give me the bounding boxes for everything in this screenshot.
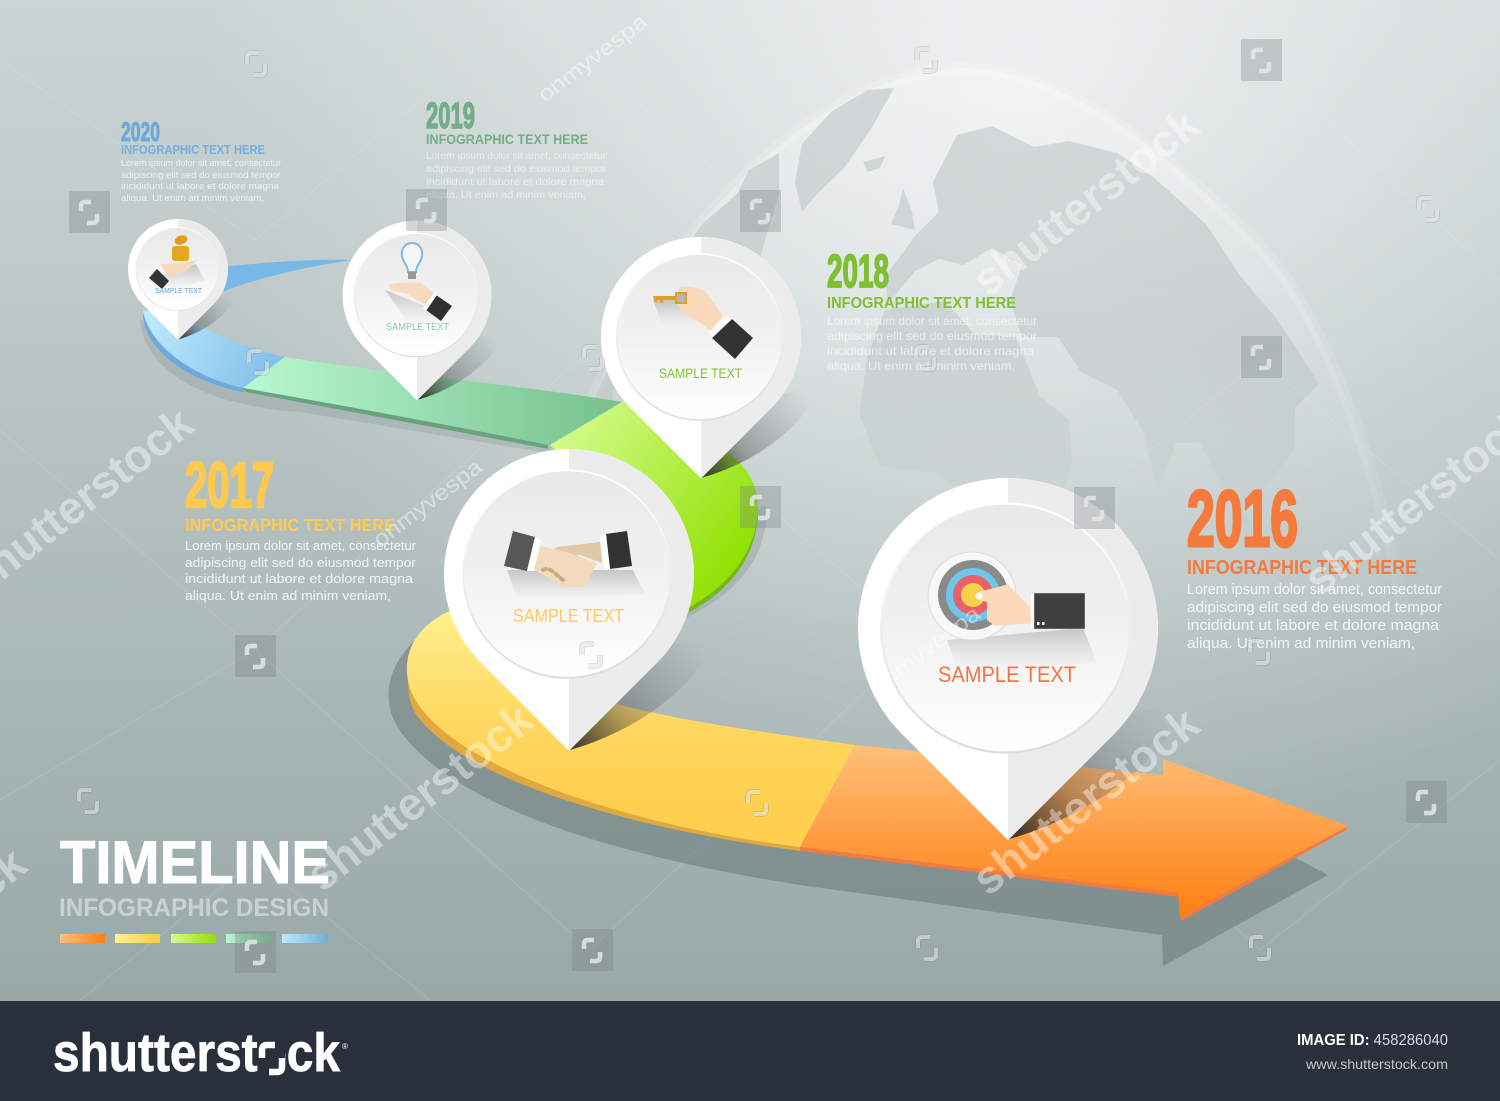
text block: 2018 bbox=[827, 245, 1037, 373]
title: TIMELINE bbox=[60, 829, 330, 896]
body text: incididunt ut labore et dolore magna bbox=[121, 181, 280, 192]
icon: hand with light bulb bbox=[385, 243, 452, 325]
pin: 2016 bbox=[858, 478, 1188, 840]
pin: 2018 bbox=[601, 237, 821, 478]
pin: 2017 bbox=[444, 449, 719, 751]
image id: IMAGE ID: 458286040 bbox=[1297, 1032, 1448, 1049]
text block: 2019 bbox=[426, 95, 607, 201]
ribbon segment: yellow 2017 bbox=[407, 606, 855, 851]
body text: aliqua. Ut enim ad minim veniam, bbox=[426, 189, 586, 201]
pin: 2019 bbox=[342, 220, 506, 400]
body text bbox=[827, 314, 1037, 373]
body text: incididunt ut labore et dolore magna bbox=[185, 571, 414, 586]
timeline ribbon bbox=[140, 260, 1348, 966]
title block bbox=[59, 829, 330, 943]
watermark text: shutterstock: shutterstock bbox=[962, 97, 1209, 306]
year 2016: 2016 bbox=[1187, 474, 1298, 563]
body text: aliqua. Ut enim ad minim veniam, bbox=[185, 588, 391, 603]
colour legend bars bbox=[60, 934, 328, 943]
ribbon back strip: blue bbox=[222, 260, 352, 291]
watermark text: shutterstock: shutterstock bbox=[962, 696, 1209, 905]
heading: INFOGRAPHIC TEXT HERE bbox=[827, 295, 1016, 312]
body text bbox=[185, 538, 417, 603]
icon: target with pointing hand bbox=[928, 552, 1097, 670]
body text: aliqua. Ut enim ad minim veniam, bbox=[121, 193, 264, 204]
icon: handshake bbox=[504, 531, 645, 600]
world globe bbox=[500, 68, 1412, 680]
text block: 2020 bbox=[121, 117, 281, 204]
body text: incididunt ut labore et dolore magna bbox=[1187, 618, 1440, 634]
year 2019: 2019 bbox=[426, 95, 475, 136]
text block: 2017 bbox=[185, 449, 417, 603]
icon: hand with key bbox=[653, 287, 753, 359]
pin label: SAMPLE TEXT bbox=[386, 322, 449, 333]
upper ribbon shadow bbox=[140, 320, 610, 455]
body text: Lorem ipsum dolor sit amet, consectetur bbox=[827, 314, 1037, 328]
body text: aliqua. Ut enim ad minim veniam, bbox=[1187, 636, 1415, 652]
ribbon ground shadow bbox=[389, 620, 1328, 966]
pin label: SAMPLE TEXT bbox=[155, 288, 203, 295]
body text: adipiscing elit sed do eiusmod tempor bbox=[185, 555, 417, 570]
watermark text: onmyvespa bbox=[368, 8, 986, 699]
text block: 2016 bbox=[1187, 474, 1442, 652]
body text: Lorem ipsum dolor sit amet, consectetur bbox=[1187, 582, 1442, 598]
body text: incididunt ut labore et dolore magna bbox=[827, 344, 1034, 358]
subtitle: INFOGRAPHIC DESIGN bbox=[59, 894, 329, 922]
website: www.shutterstock.com bbox=[1305, 1056, 1448, 1072]
pin label: SAMPLE TEXT bbox=[938, 662, 1076, 687]
lime ribbon shadow bbox=[620, 505, 766, 660]
body text bbox=[121, 158, 281, 204]
year 2018: 2018 bbox=[827, 245, 889, 297]
footer logo: shutterstock bbox=[53, 1023, 341, 1083]
ribbon segment: blue 2020 bbox=[143, 310, 285, 392]
year 2017: 2017 bbox=[185, 449, 274, 521]
pin label: SAMPLE TEXT bbox=[659, 366, 742, 381]
body text: incididunt ut labore et dolore magna bbox=[426, 176, 604, 188]
heading: INFOGRAPHIC TEXT HERE bbox=[121, 143, 265, 157]
year 2020: 2020 bbox=[121, 117, 160, 147]
footer bar bbox=[0, 1001, 1500, 1101]
heading: INFOGRAPHIC TEXT HERE bbox=[426, 131, 588, 147]
body text: Lorem ipsum dolor sit amet, consectetur bbox=[426, 150, 606, 162]
body text bbox=[426, 150, 607, 201]
body text: adipiscing elit sed do eiusmod tempor bbox=[1187, 600, 1442, 616]
body text: aliqua. Ut enim ad minim veniam, bbox=[827, 359, 1015, 373]
body text: adipiscing elit sed do eiusmod tempor bbox=[827, 329, 1037, 343]
watermark line icons bbox=[79, 49, 1437, 959]
ribbon segment: orange arrow 2016 bbox=[800, 745, 1348, 921]
watermark square icons bbox=[69, 39, 1447, 973]
watermark text: onmyvespa: onmyvespa bbox=[866, 600, 986, 699]
body text: Lorem ipsum dolor sit amet, consectetur bbox=[185, 538, 417, 553]
footer logo: ® bbox=[342, 1042, 348, 1051]
watermark text: onmyvespa: onmyvespa bbox=[533, 8, 653, 107]
heading: INFOGRAPHIC TEXT HERE bbox=[1187, 557, 1417, 579]
continents bbox=[568, 88, 1319, 562]
body text bbox=[1187, 582, 1442, 652]
ribbon segment: lime 2018 bbox=[550, 402, 758, 612]
watermark text: onmyvespa: onmyvespa bbox=[368, 453, 488, 552]
body text: adipiscing elit sed do eiusmod tempor bbox=[426, 163, 607, 175]
heading: INFOGRAPHIC TEXT HERE bbox=[185, 515, 395, 535]
watermark text: shutterstock: shutterstock bbox=[296, 692, 543, 901]
ribbon segment: mint 2019 bbox=[243, 357, 622, 449]
icon: hand with coins bbox=[149, 234, 205, 290]
body text: adipiscing elit sed do eiusmod tempor bbox=[121, 170, 281, 181]
pin: 2020 bbox=[128, 219, 238, 340]
pin label: SAMPLE TEXT bbox=[513, 606, 624, 626]
body text: Lorem ipsum dolor sit amet, consectetur bbox=[121, 158, 281, 169]
